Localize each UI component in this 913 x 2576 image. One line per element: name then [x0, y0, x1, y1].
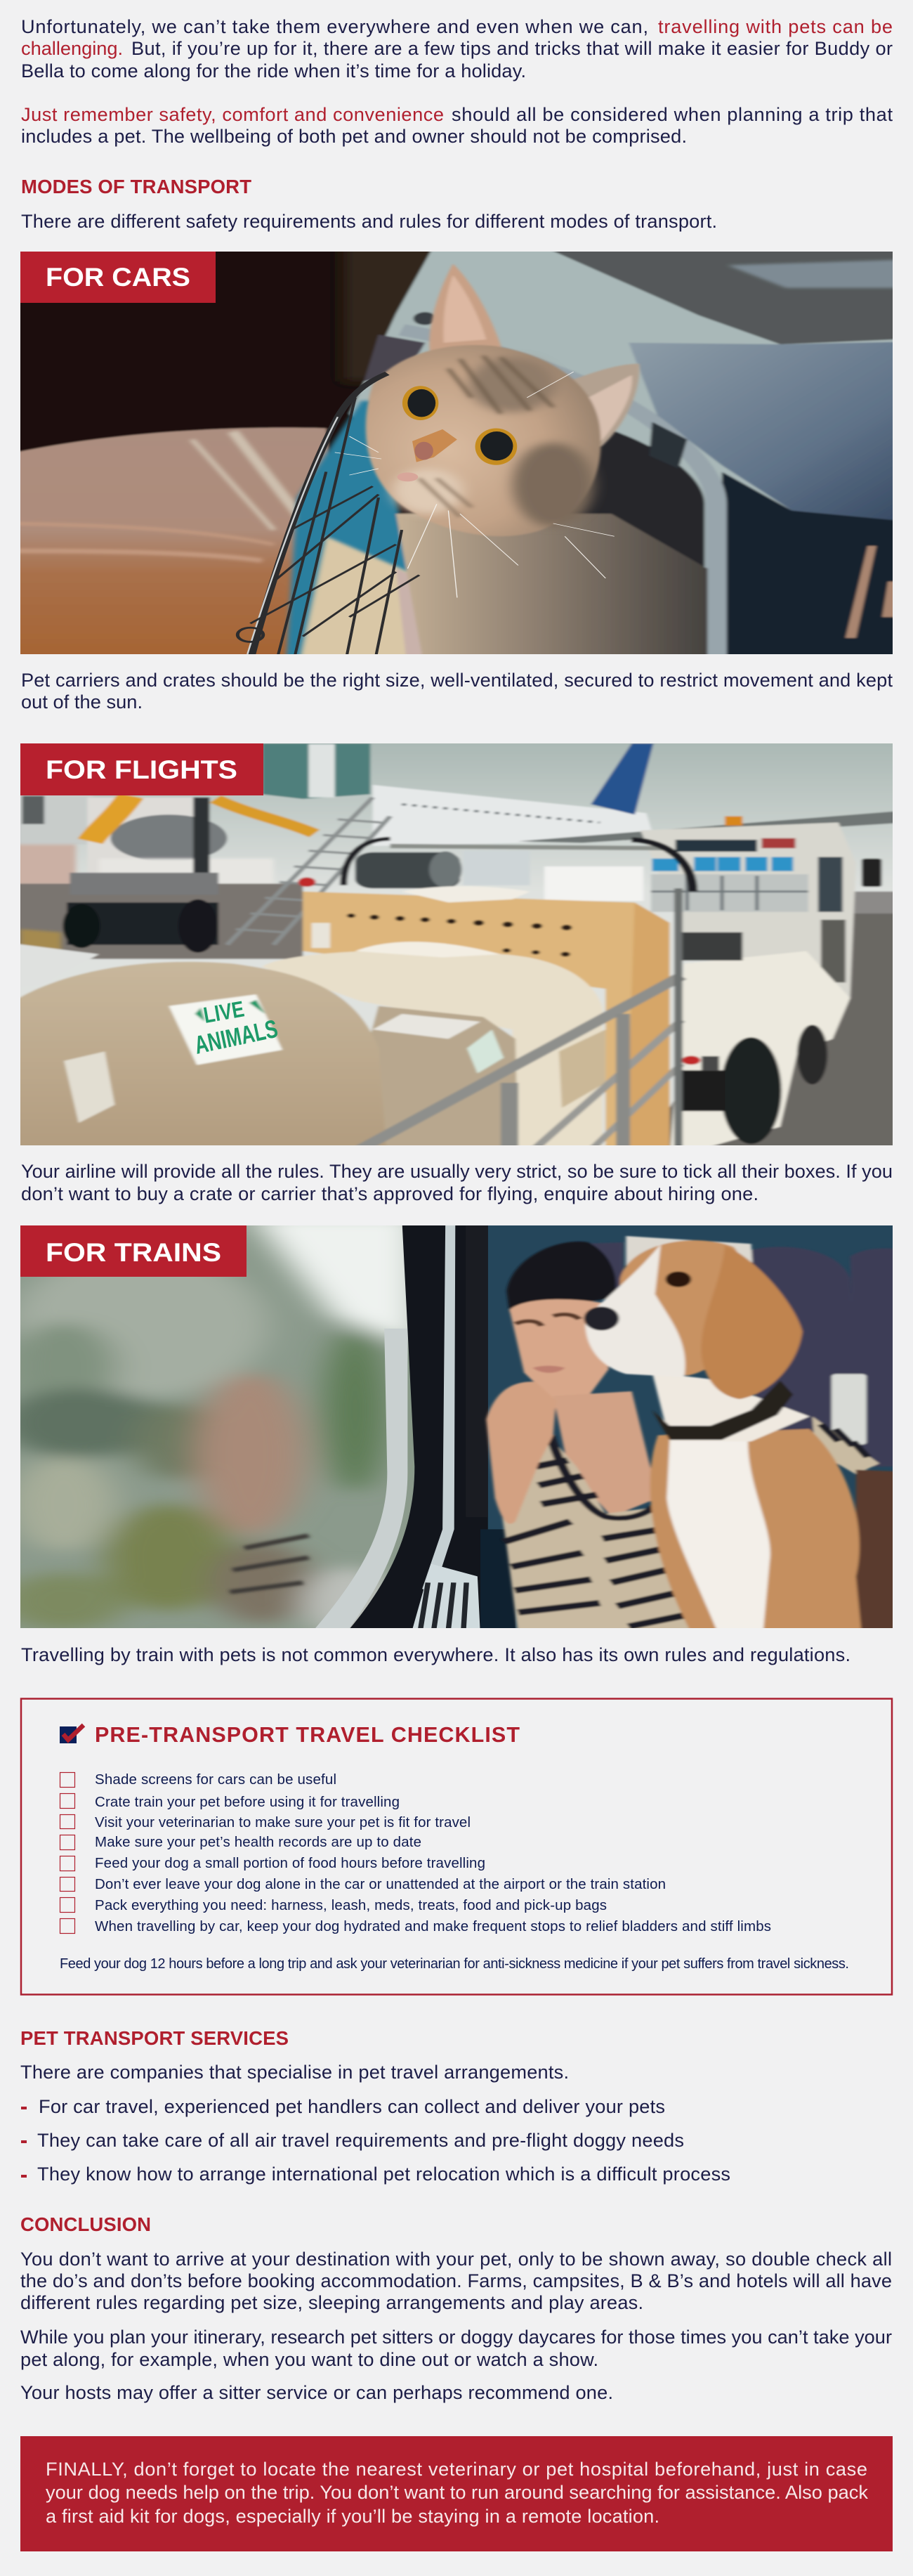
icon: cat head [366, 264, 640, 536]
label: for cars [20, 252, 216, 303]
callout: finally: FINALLY, don’t forget to locate the nearest veterinary or pet hospital beforehand, just in case [46, 2458, 867, 2480]
text block: conclusion paragraphs [20, 2248, 892, 2403]
panel: for flights photo [20, 743, 893, 1145]
caption: for trains: Travelling by train with pets is not common everywhere. It also has its own rules and regulations. [21, 1644, 850, 1665]
caption: for flights [21, 1160, 893, 1204]
label: for flights: FOR FLIGHTS [46, 755, 237, 784]
text block: introduction paragraph 1: Bella to come along for the ride when it’s time for a holiday. [21, 60, 526, 82]
text block: introduction paragraph 2: Just remember safety, comfort and convenience [21, 103, 444, 125]
checkbox list: Feed your dog a small portion of food hours before travelling [95, 1855, 485, 1871]
panel: for cars photo [20, 252, 893, 654]
list: services: They know how to arrange international pet relocation which is a difficult process [37, 2163, 730, 2185]
text block: introduction paragraph 1: Unfortunately, we can’t take them everywhere and even when we can, [21, 15, 648, 37]
text block: introduction paragraph 2: includes a pet. The wellbeing of both pet and owner should not be comprised. [21, 125, 687, 147]
text block: conclusion paragraphs: Your hosts may offer a sitter service or can perhaps recommend one. [20, 2381, 613, 2403]
text block: introduction paragraph 1: challenging. [21, 37, 123, 59]
woman [486, 1242, 913, 1636]
caption: for flights: don’t want to buy a crate or carrier that’s approved for flying, enquire about hiring one. [21, 1183, 758, 1204]
text block: introduction paragraph 2: should all be considered when planning a trip that [452, 103, 893, 125]
checkbox list: Crate train your pet before using it for travelling [95, 1794, 400, 1810]
caption: for cars: Pet carriers and crates should be the right size, well-ventilated, secured to restrict movement and kept [21, 669, 893, 691]
checkbox list: Pack everything you need: harness, leash, meds, treats, food and pick-up bags [95, 1897, 607, 1913]
text block: introduction paragraph 1: But, if you’re up for it, there are a few tips and tricks that will make it easier for Buddy or [131, 37, 893, 59]
label: for trains: FOR TRAINS [46, 1238, 221, 1267]
checkbox list: Visit your veterinarian to make sure your pet is fit for travel [95, 1814, 471, 1830]
text block: services intro: There are companies that specialise in pet travel arrangements. [20, 2061, 569, 2083]
icon: wire cage door [237, 373, 419, 672]
heading: conclusion: CONCLUSION [20, 2213, 151, 2235]
sticker: live animals: ANIMALS [192, 1014, 280, 1060]
panel: pre-transport travel checklist [21, 1699, 892, 1994]
list: services [21, 2095, 730, 2185]
text block: conclusion paragraphs: pet along, for example, when you want to dine out or watch a show. [20, 2348, 598, 2370]
list: services: For car travel, experienced pet handlers can collect and deliver your pets [39, 2095, 665, 2117]
icon: checkmark box [60, 1725, 84, 1743]
callout: finally [20, 2436, 893, 2551]
text block: conclusion paragraphs: While you plan your itinerary, research pet sitters or doggy daycares for those times you can’t take your [20, 2326, 892, 2348]
callout: finally: your dog needs help on the trip. You don’t want to run around searching for assistance. Also pack [46, 2481, 868, 2503]
checkbox list: Don’t ever leave your dog alone in the car or unattended at the airport or the train station [95, 1876, 666, 1892]
text block: conclusion paragraphs: You don’t want to arrive at your destination with your pet, only to be shown away, so double check all [20, 2248, 892, 2270]
callout: finally: a first aid kit for dogs, especially if you’ll be staying in a remote location. [46, 2505, 659, 2527]
text block: conclusion paragraphs: the do’s and don’ts before booking accommodation. Farms, campsites, B & B’s and hotels will all have [20, 2270, 892, 2291]
text block: conclusion paragraphs: different rules regarding pet size, sleeping arrangements and play areas. [20, 2291, 643, 2313]
text block: introduction paragraph 2 [21, 103, 893, 147]
text block: modes intro: There are different safety requirements and rules for different modes of transport. [21, 210, 717, 232]
heading: checklist: PRE-TRANSPORT TRAVEL CHECKLIST [95, 1723, 520, 1747]
note: travel sickness: Feed your dog 12 hours before a long trip and ask your veterinarian for anti-sickness medicine if your pet suffers from travel sickness. [60, 1956, 849, 1972]
heading: pet transport services: PET TRANSPORT SERVICES [20, 2027, 289, 2049]
checkbox list [60, 1771, 771, 1934]
sticker: live animals [197, 1001, 278, 1054]
beagle [584, 1240, 862, 1636]
label: for flights [20, 743, 263, 795]
checkbox list: Shade screens for cars can be useful [95, 1771, 336, 1788]
sticker: live animals: LIVE [202, 996, 246, 1028]
panel: for trains photo [20, 1225, 893, 1628]
text block: introduction paragraph 1 [21, 15, 893, 82]
caption: for cars: out of the sun. [21, 691, 143, 713]
checkbox list: When travelling by car, keep your dog hydrated and make frequent stops to relief bladders and stiff limbs [95, 1918, 771, 1934]
label: for cars: FOR CARS [46, 263, 190, 292]
caption: for cars [21, 669, 893, 713]
checkbox list: Make sure your pet’s health records are up to date [95, 1834, 421, 1850]
list: services: They can take care of all air travel requirements and pre-flight doggy needs [37, 2129, 684, 2151]
label: for trains [20, 1225, 247, 1277]
text block: introduction paragraph 1: travelling with pets can be [658, 15, 893, 37]
caption: for flights: Your airline will provide all the rules. They are usually very strict, so be sure to tick all their boxes. If you [21, 1160, 893, 1182]
heading: modes of transport: MODES OF TRANSPORT [21, 176, 251, 197]
